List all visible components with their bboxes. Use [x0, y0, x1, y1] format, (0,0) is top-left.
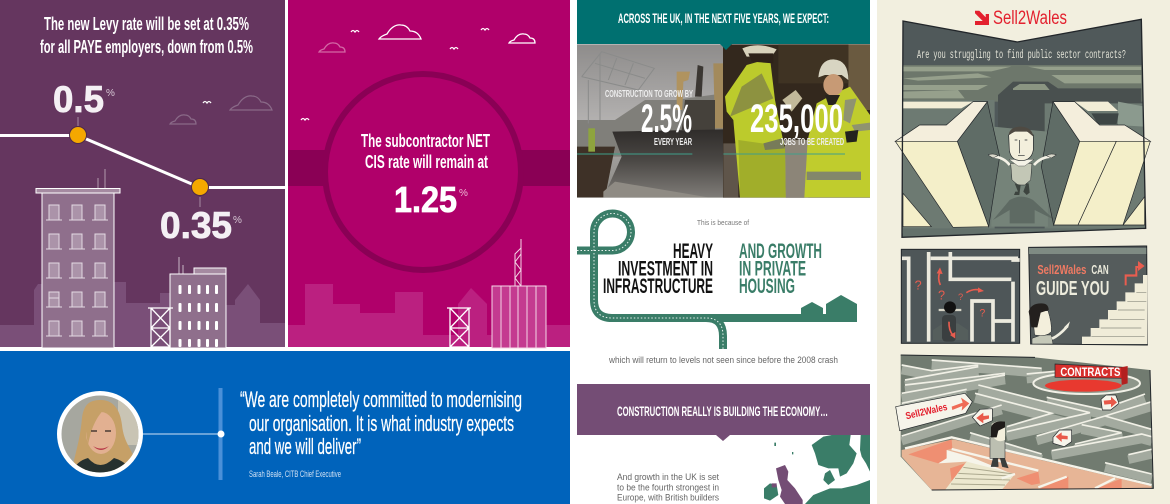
guide heading: GUIDE YOU: [1036, 277, 1109, 300]
rate line chart: [0, 117, 285, 207]
heading: for all PAYE employers, down from 0.5%: [40, 37, 253, 57]
main sign: Sell2Wales: [905, 402, 949, 422]
panel: building the economy: [577, 384, 870, 504]
stairs: [1082, 275, 1147, 344]
contracts goal: CONTRACTS: [1060, 365, 1120, 379]
striped building and mast: [492, 239, 546, 348]
building: tall tower: [36, 169, 120, 348]
circle text: [361, 131, 490, 220]
question marks and arrows: ?: [915, 278, 922, 292]
comic frame: maze: [895, 19, 1150, 237]
body text: Europe, with British builders: [617, 492, 719, 504]
value: 0.35%: %: [233, 215, 242, 226]
heading: housing: AND GROWTH: [739, 240, 822, 263]
houses: [801, 295, 857, 322]
heading: housing: [739, 240, 822, 298]
red stepped arrow: [1115, 261, 1145, 285]
band behind circle: [288, 150, 570, 186]
value: 0.5%: %: [106, 88, 115, 99]
guide heading: CAN: [1091, 262, 1109, 277]
guide heading: Sell2Wales: [1037, 262, 1086, 277]
body text: to be the fourth strongest in: [617, 482, 719, 494]
heading: infrastructure: [603, 240, 713, 298]
circle text: 1.25: [394, 179, 457, 220]
heading: ACROSS THE UK, IN THE NEXT FIVE YEARS, WE EXPECT:: [618, 10, 829, 26]
stat: 235,000 jobs: JOBS TO BE CREATED: [780, 136, 844, 148]
photo: bulldozer: [577, 44, 723, 198]
panel: quote: [0, 351, 570, 504]
guide heading: [1036, 262, 1109, 300]
heading: infrastructure: HEAVY: [673, 240, 713, 263]
panel: reasons with road: [577, 214, 857, 365]
quote text: and we will deliver”: [249, 434, 361, 459]
question marks and arrows: ?: [958, 292, 963, 302]
ring with rate: [325, 74, 521, 270]
notch: [716, 435, 730, 441]
contracts goal: [1045, 364, 1128, 392]
circle text: %: [459, 188, 468, 199]
stat: 235,000 jobs: 235,000: [750, 97, 843, 141]
building: short block: [170, 257, 226, 348]
figure from above: [933, 301, 968, 342]
quote text: “We are completely committed to modernising: [240, 387, 522, 412]
body text: [617, 472, 719, 504]
stat: 2.5%: [605, 88, 693, 148]
heading: infrastructure: INFRASTRUCTURE: [603, 275, 713, 298]
panel: Sell2Wales comic: [877, 0, 1170, 504]
notch: [720, 44, 732, 50]
map of Europe: [764, 435, 870, 504]
scaffold tower: [148, 308, 173, 347]
quote text: our organisation. It is what industry expects: [249, 411, 514, 436]
clouds and birds: [301, 25, 535, 120]
shadow: [993, 197, 1055, 223]
clouds and bird: [170, 96, 272, 124]
panel: levy rate: [0, 0, 285, 348]
stat: 235,000 jobs: [750, 97, 844, 148]
quote text: [240, 387, 522, 480]
main sign: [896, 393, 972, 431]
peach floors: [902, 439, 1152, 490]
heading: housing: IN PRIVATE: [739, 258, 806, 280]
comic frame: maze with signs: [896, 355, 1153, 490]
circle text: CIS rate will remain at: [365, 152, 488, 172]
heading: CONSTRUCTION REALLY IS BUILDING THE ECONOMY…: [617, 403, 828, 419]
circle text: The subcontractor NET: [361, 131, 490, 151]
heading: [40, 14, 253, 57]
question marks and arrows: [915, 267, 985, 339]
character: shrugging man: [988, 127, 1056, 195]
question marks and arrows: ?: [979, 308, 985, 320]
small signs: [972, 395, 1119, 447]
stat: 2.5%: EVERY YEAR: [654, 136, 692, 148]
comic frame: lost in maze: [901, 249, 1020, 343]
logo: Sell2Wales: [993, 8, 1067, 29]
photo: workers: [723, 44, 870, 198]
body text: And growth in the UK is set: [617, 472, 719, 483]
question marks and arrows: ?: [938, 288, 945, 302]
figure: person walking: [990, 421, 1008, 468]
scaffold tower: [447, 308, 471, 347]
panel: UK forecast: [577, 0, 870, 198]
road: [577, 214, 857, 349]
stat: 2.5%: CONSTRUCTION TO GROW BY: [605, 88, 693, 100]
quote text: Sarah Beale, CITB Chief Executive: [249, 469, 341, 480]
guide man: [1029, 303, 1070, 344]
portrait: [57, 391, 143, 477]
comic frame: guide: [1029, 246, 1147, 345]
arena: [1033, 373, 1140, 394]
panel: subcontractor CIS rate: [288, 0, 570, 348]
heading: housing: HOUSING: [739, 275, 795, 298]
value: 0.35%: 0.35: [160, 205, 232, 246]
heading: infrastructure: INVESTMENT IN: [618, 258, 713, 280]
stat: 2.5%: 2.5%: [641, 97, 692, 141]
logo: [975, 8, 1067, 29]
value: 0.5%: 0.5: [53, 79, 104, 120]
wall tops: [902, 360, 1152, 474]
skyline silhouette: [288, 284, 570, 347]
wall sides: [902, 365, 1152, 479]
connector line and bar: [143, 388, 224, 480]
caption: which will return to levels not seen since before the 2008 crash: [608, 355, 838, 365]
intro text: This is because of: [697, 218, 750, 227]
skyline silhouette: [0, 282, 285, 347]
heading: The new Levy rate will be set at 0.35%: [44, 14, 249, 34]
